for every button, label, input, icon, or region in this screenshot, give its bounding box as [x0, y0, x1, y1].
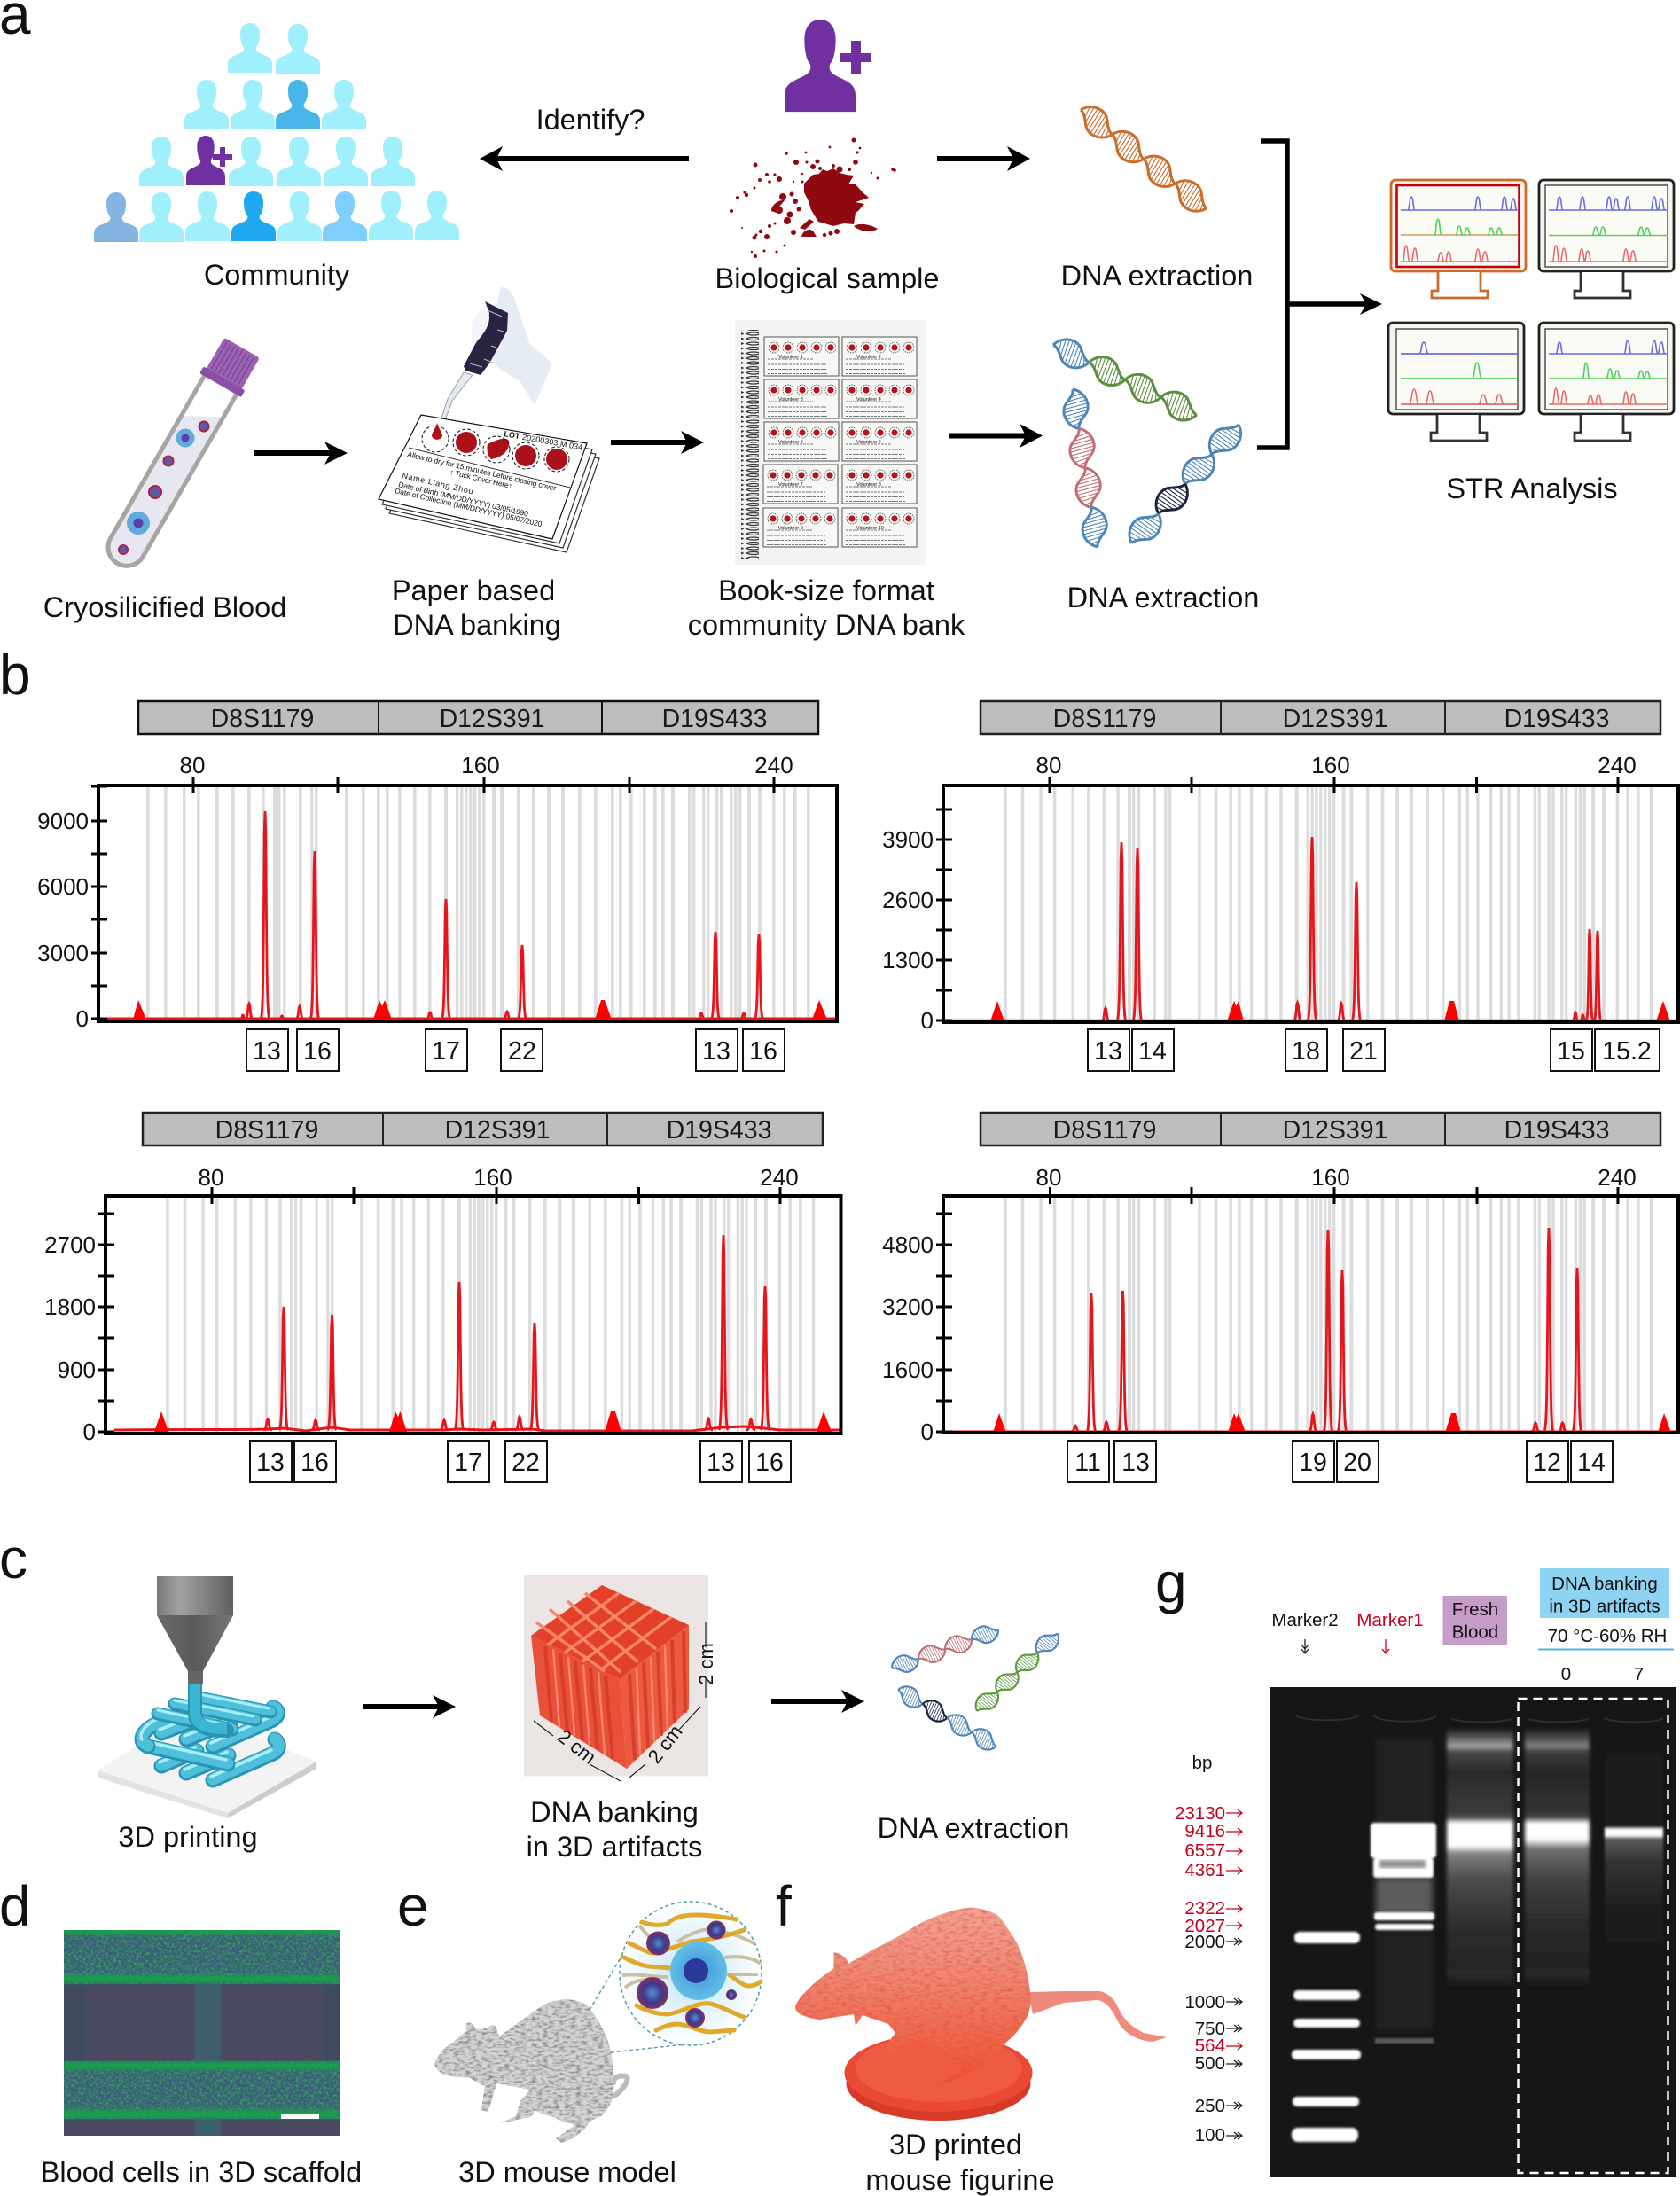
identify label: Identify?: [536, 104, 645, 136]
allele numbers: 15: [1557, 1037, 1585, 1066]
icon: gloved hand with dropper: [437, 286, 552, 433]
icon: purple person with plus: [785, 20, 871, 112]
gel header labels: Marker1: [1356, 1610, 1424, 1630]
chart: electropherogram top right: 240: [1598, 752, 1637, 778]
allele numbers: 15.2: [1602, 1037, 1652, 1066]
allele numbers: 11: [1074, 1449, 1101, 1477]
locus header bar: [138, 701, 818, 734]
notebook DNA bank: Volunteer 6: [856, 440, 881, 445]
chart: electropherogram lower left: 1800: [44, 1293, 96, 1320]
ladder size labels: 500: [1195, 2053, 1225, 2074]
allele boxes: [1088, 1029, 1660, 1071]
allele numbers: [253, 1037, 777, 1066]
panel label d: d: [0, 1874, 31, 1938]
photo: printed red cube with blood: [524, 1575, 717, 1781]
allele numbers: 16: [301, 1449, 329, 1477]
DNA extraction label top: DNA extraction: [1061, 260, 1253, 292]
allele numbers: 18: [1292, 1037, 1320, 1066]
locus header bar: D19S433: [1504, 705, 1609, 733]
book-size label: community DNA bank: [688, 609, 965, 641]
DNA extraction label c: DNA extraction: [878, 1812, 1069, 1844]
lane numbers: 7: [1634, 1664, 1644, 1684]
chart: electropherogram lower left: 240: [760, 1164, 799, 1191]
notebook DNA bank: Volunteer 8: [856, 482, 881, 488]
locus header bar: D19S433: [662, 705, 767, 733]
chart: electropherogram lower right: 0: [921, 1418, 934, 1445]
icon: small DNA green: [971, 1627, 1064, 1718]
paper based label: DNA banking: [393, 609, 561, 641]
notebook DNA bank: [735, 320, 926, 565]
second filament layer: [141, 1707, 277, 1747]
notebook DNA bank: Volunteer 1: [778, 355, 803, 360]
lane: 3D artifact day 7: [1605, 1729, 1663, 1968]
paper based DNA card stack: ↑ Tuck Cover Here↑: [449, 467, 513, 490]
DNA banking box: [1540, 1568, 1669, 1618]
chart: electropherogram lower right: 80: [1036, 1164, 1061, 1191]
lane: fresh blood: [1447, 1729, 1513, 1986]
blood cells label: Blood cells in 3D scaffold: [41, 2156, 362, 2188]
allele boxes: [1067, 1441, 1613, 1482]
bracket and arrow to STR: [1257, 141, 1382, 448]
third filament layer: [148, 1742, 228, 1764]
notebook DNA bank: Volunteer 7: [778, 482, 803, 488]
bottom filament layer: [160, 1739, 278, 1780]
allele numbers: 13: [702, 1037, 731, 1066]
dimension labels: [553, 1643, 717, 1769]
allele numbers: 13: [1094, 1037, 1122, 1066]
lane numbers: 0: [1561, 1664, 1571, 1684]
allele numbers: [1094, 1037, 1652, 1066]
allele numbers: 22: [512, 1449, 540, 1477]
locus header bar: D8S1179: [1053, 1116, 1156, 1145]
lane: marker 1: [1371, 1738, 1436, 2044]
chart: electropherogram lower left: 80: [199, 1164, 223, 1191]
icon: orange DNA helix: [1073, 99, 1215, 219]
ladder size labels: 1000: [1184, 1992, 1225, 2012]
locus header bar: D12S391: [1283, 705, 1387, 733]
monitor 2: [1539, 180, 1674, 298]
photo: red printed mouse figurine: [795, 1908, 1167, 2121]
chart: electropherogram lower right: [882, 1113, 1678, 1482]
locus header bar: D12S391: [1283, 1116, 1387, 1145]
chart: electropherogram top right: 160: [1311, 752, 1350, 778]
arrow: tube to paper: [254, 442, 348, 465]
locus header bar: [981, 1113, 1660, 1145]
extruded filament: [195, 1684, 227, 1731]
book-size label: [688, 574, 965, 641]
icon: blood tube: [97, 336, 262, 575]
icon: gray 3D mouse: [434, 1999, 628, 2143]
notebook DNA bank: Volunteer 10: [856, 526, 884, 531]
locus header bar: D19S433: [1504, 1116, 1609, 1145]
allele numbers: 16: [303, 1037, 332, 1066]
gel image: [1270, 1687, 1676, 2177]
paper based DNA card stack: Date of Collection (MM/DD/YYYY) 05/07/2020: [395, 486, 543, 528]
paper based DNA card stack: Date of Birth (MM/DD/YYYY) 03/05/1990: [398, 480, 529, 519]
top filament layer: [158, 1694, 270, 1730]
chart: electropherogram lower left: 0: [83, 1418, 96, 1445]
ladder size labels: [1175, 1803, 1242, 2145]
fresh blood box: Blood: [1452, 1622, 1498, 1642]
DNA banking in 3D artifacts label: in 3D artifacts: [527, 1831, 702, 1863]
chart: electropherogram lower right: 160: [1311, 1164, 1350, 1191]
chart: electropherogram top left: [37, 701, 837, 1071]
notebook DNA bank: Volunteer 2: [856, 355, 881, 360]
allele boxes: [246, 1029, 785, 1071]
monitor 1: orange: [1391, 180, 1526, 298]
panel label e: e: [397, 1874, 429, 1938]
gel wells: [1296, 1715, 1663, 1722]
gel header labels: Marker2: [1271, 1610, 1339, 1630]
dimension labels: 2 cm: [695, 1643, 717, 1685]
icon: small DNA blue-dark: [894, 1682, 1001, 1754]
ladder size labels: 2027: [1184, 1916, 1225, 1936]
chart: electropherogram top right: 2600: [882, 887, 934, 913]
allele numbers: 13: [256, 1449, 285, 1477]
icon: blood splatter: [730, 138, 896, 258]
arrow: printing to artifact: [363, 1695, 456, 1718]
allele numbers: 21: [1349, 1037, 1378, 1066]
icon: small DNA red-blue: [888, 1621, 1002, 1677]
nozzle: [157, 1576, 233, 1684]
locus header bar: D8S1179: [215, 1116, 318, 1145]
bp label: bp: [1192, 1753, 1212, 1773]
chart: electropherogram top left: 9000: [37, 808, 89, 834]
purple person in community: [186, 136, 232, 185]
notebook DNA bank: Volunteer 5: [778, 440, 803, 445]
scale bar: [281, 2114, 319, 2119]
allele numbers: 13: [253, 1037, 281, 1066]
micrograph: blood cells in scaffold: [64, 1928, 340, 2136]
3D printed mouse figurine label: [865, 2129, 1055, 2196]
allele numbers: 13: [707, 1449, 735, 1477]
chart: electropherogram top left: 0: [76, 1005, 89, 1032]
DNA banking in 3D artifacts label: [527, 1796, 702, 1863]
icon: blue-dark DNA helix: [1121, 416, 1248, 552]
dimension labels: 2 cm: [644, 1721, 687, 1768]
chart: electropherogram lower left: 900: [58, 1356, 96, 1383]
book-size label: Book-size format: [718, 574, 934, 606]
ladder size labels: 250: [1195, 2096, 1225, 2116]
chart: electropherogram top right: [882, 701, 1678, 1071]
ladder size labels: 100: [1195, 2125, 1225, 2145]
biological sample label: Biological sample: [715, 262, 939, 294]
lane: marker 2: [1292, 1932, 1361, 2142]
paper based DNA card stack: Allow to dry for 15 minutes before closing cover: [407, 449, 558, 493]
arrow: paper to book: [611, 431, 704, 454]
locus header bar: D8S1179: [1053, 705, 1156, 733]
icon: 3D printing nozzle and stack: [98, 1576, 316, 1818]
chart: electropherogram top left: 3000: [37, 940, 89, 966]
allele numbers: 17: [432, 1037, 460, 1066]
allele numbers: 19: [1299, 1449, 1327, 1477]
ladder size labels: 23130: [1175, 1803, 1225, 1824]
locus header bar: [143, 1113, 823, 1145]
figurine base: [844, 2034, 1032, 2121]
allele numbers: [256, 1449, 784, 1477]
community label: Community: [204, 259, 350, 291]
DNA banking in 3D artifacts label: DNA banking: [530, 1796, 699, 1828]
fresh blood box: [1443, 1596, 1507, 1645]
chart: electropherogram top right: 1300: [882, 947, 934, 973]
paper based DNA card stack: [379, 415, 599, 552]
lane: 3D artifact day 0: [1525, 1729, 1590, 1986]
allele numbers: 22: [508, 1037, 536, 1066]
monitor 4: [1539, 323, 1674, 441]
gel header labels: [1271, 1610, 1424, 1653]
notebook DNA bank: Volunteer 4: [856, 397, 881, 402]
dimension labels: 2 cm: [553, 1725, 600, 1769]
allele numbers: [1074, 1449, 1606, 1477]
chart: electropherogram lower left: [44, 1113, 840, 1482]
arrow: to community: [480, 146, 689, 171]
allele numbers: 16: [755, 1449, 784, 1477]
locus header bar: [981, 701, 1660, 734]
chart: electropherogram lower right: 240: [1598, 1164, 1637, 1191]
chart: electropherogram top right: 80: [1036, 752, 1061, 778]
panel label g: g: [1155, 1551, 1187, 1614]
panel label b: b: [0, 643, 31, 707]
icon: green DNA helix: [1047, 333, 1202, 426]
chart: electropherogram top right: 3900: [882, 826, 934, 853]
3D mouse model label: 3D mouse model: [458, 2156, 676, 2188]
chart: electropherogram top left: 240: [754, 752, 793, 778]
ladder size labels: 9416: [1184, 1821, 1225, 1841]
notebook DNA bank: Volunteer 9: [778, 526, 803, 531]
locus header bar: D8S1179: [211, 705, 314, 733]
icon: red-blue DNA helix: [1059, 387, 1111, 549]
build plate: [98, 1711, 316, 1818]
arrow: book to DNA: [949, 424, 1043, 448]
allele numbers: 14: [1138, 1037, 1167, 1066]
chart: electropherogram lower right: 1600: [882, 1356, 934, 1383]
locus header bar: D12S391: [445, 1116, 550, 1145]
chart: electropherogram lower left: 2700: [44, 1231, 96, 1258]
lane numbers: [1561, 1664, 1644, 1684]
ladder size labels: 6557: [1184, 1840, 1225, 1861]
paper based label: [392, 574, 561, 641]
tail: [1028, 1991, 1167, 2042]
allele numbers: 12: [1533, 1449, 1561, 1477]
ladder size labels: 2000: [1184, 1932, 1225, 1952]
allele numbers: 16: [749, 1037, 777, 1066]
ladder size labels: 4361: [1184, 1860, 1225, 1880]
ladder size labels: 564: [1195, 2036, 1225, 2056]
allele numbers: 20: [1343, 1449, 1371, 1477]
fresh blood box: Fresh: [1452, 1599, 1498, 1620]
ladder size labels: 2322: [1184, 1898, 1225, 1919]
locus header bar: D12S391: [440, 705, 544, 733]
chart: electropherogram top right: 0: [921, 1007, 934, 1034]
3D printing label: 3D printing: [118, 1821, 258, 1853]
paper based label: Paper based: [392, 574, 555, 606]
ladder size labels: 750: [1195, 2019, 1225, 2039]
arrow: sample to DNA: [937, 146, 1030, 171]
3D printed mouse figurine label: mouse figurine: [865, 2164, 1055, 2196]
locus header bar: D19S433: [667, 1116, 771, 1145]
allele boxes: [250, 1441, 791, 1482]
monitor 3: [1388, 323, 1524, 441]
paper based DNA card stack: Name Liang Zhou: [402, 471, 474, 496]
community people pyramid: [94, 23, 459, 242]
panel label f: f: [776, 1874, 792, 1938]
3D printed mouse figurine label: 3D printed: [889, 2129, 1022, 2161]
DNA extraction label lower: DNA extraction: [1067, 582, 1259, 613]
inset: cells in scaffold: [590, 1902, 762, 2052]
chart: electropherogram lower right: 4800: [882, 1231, 934, 1258]
allele numbers: 14: [1577, 1449, 1606, 1477]
DNA banking box: in 3D artifacts: [1549, 1596, 1660, 1617]
arrow: artifact to DNA: [771, 1690, 864, 1713]
dashed selection box: [1518, 1699, 1668, 2173]
chart: electropherogram top left: 6000: [37, 873, 89, 900]
chart: electropherogram top left: 80: [180, 752, 205, 778]
cryosilicified blood label: Cryosilicified Blood: [43, 591, 286, 623]
STR analysis label: STR Analysis: [1446, 473, 1618, 504]
chart: electropherogram lower right: 3200: [882, 1293, 934, 1320]
paper based DNA card stack: LOT 20200303 M 034: [504, 429, 583, 452]
chart: electropherogram lower left: 160: [473, 1164, 512, 1191]
allele numbers: 13: [1121, 1449, 1150, 1477]
chart: electropherogram top left: 160: [461, 752, 500, 778]
allele numbers: 17: [454, 1449, 482, 1477]
DNA banking box: DNA banking: [1551, 1574, 1658, 1594]
notebook DNA bank: Volunteer 3: [778, 397, 803, 402]
condition label: 70 °C-60% RH: [1548, 1626, 1667, 1646]
